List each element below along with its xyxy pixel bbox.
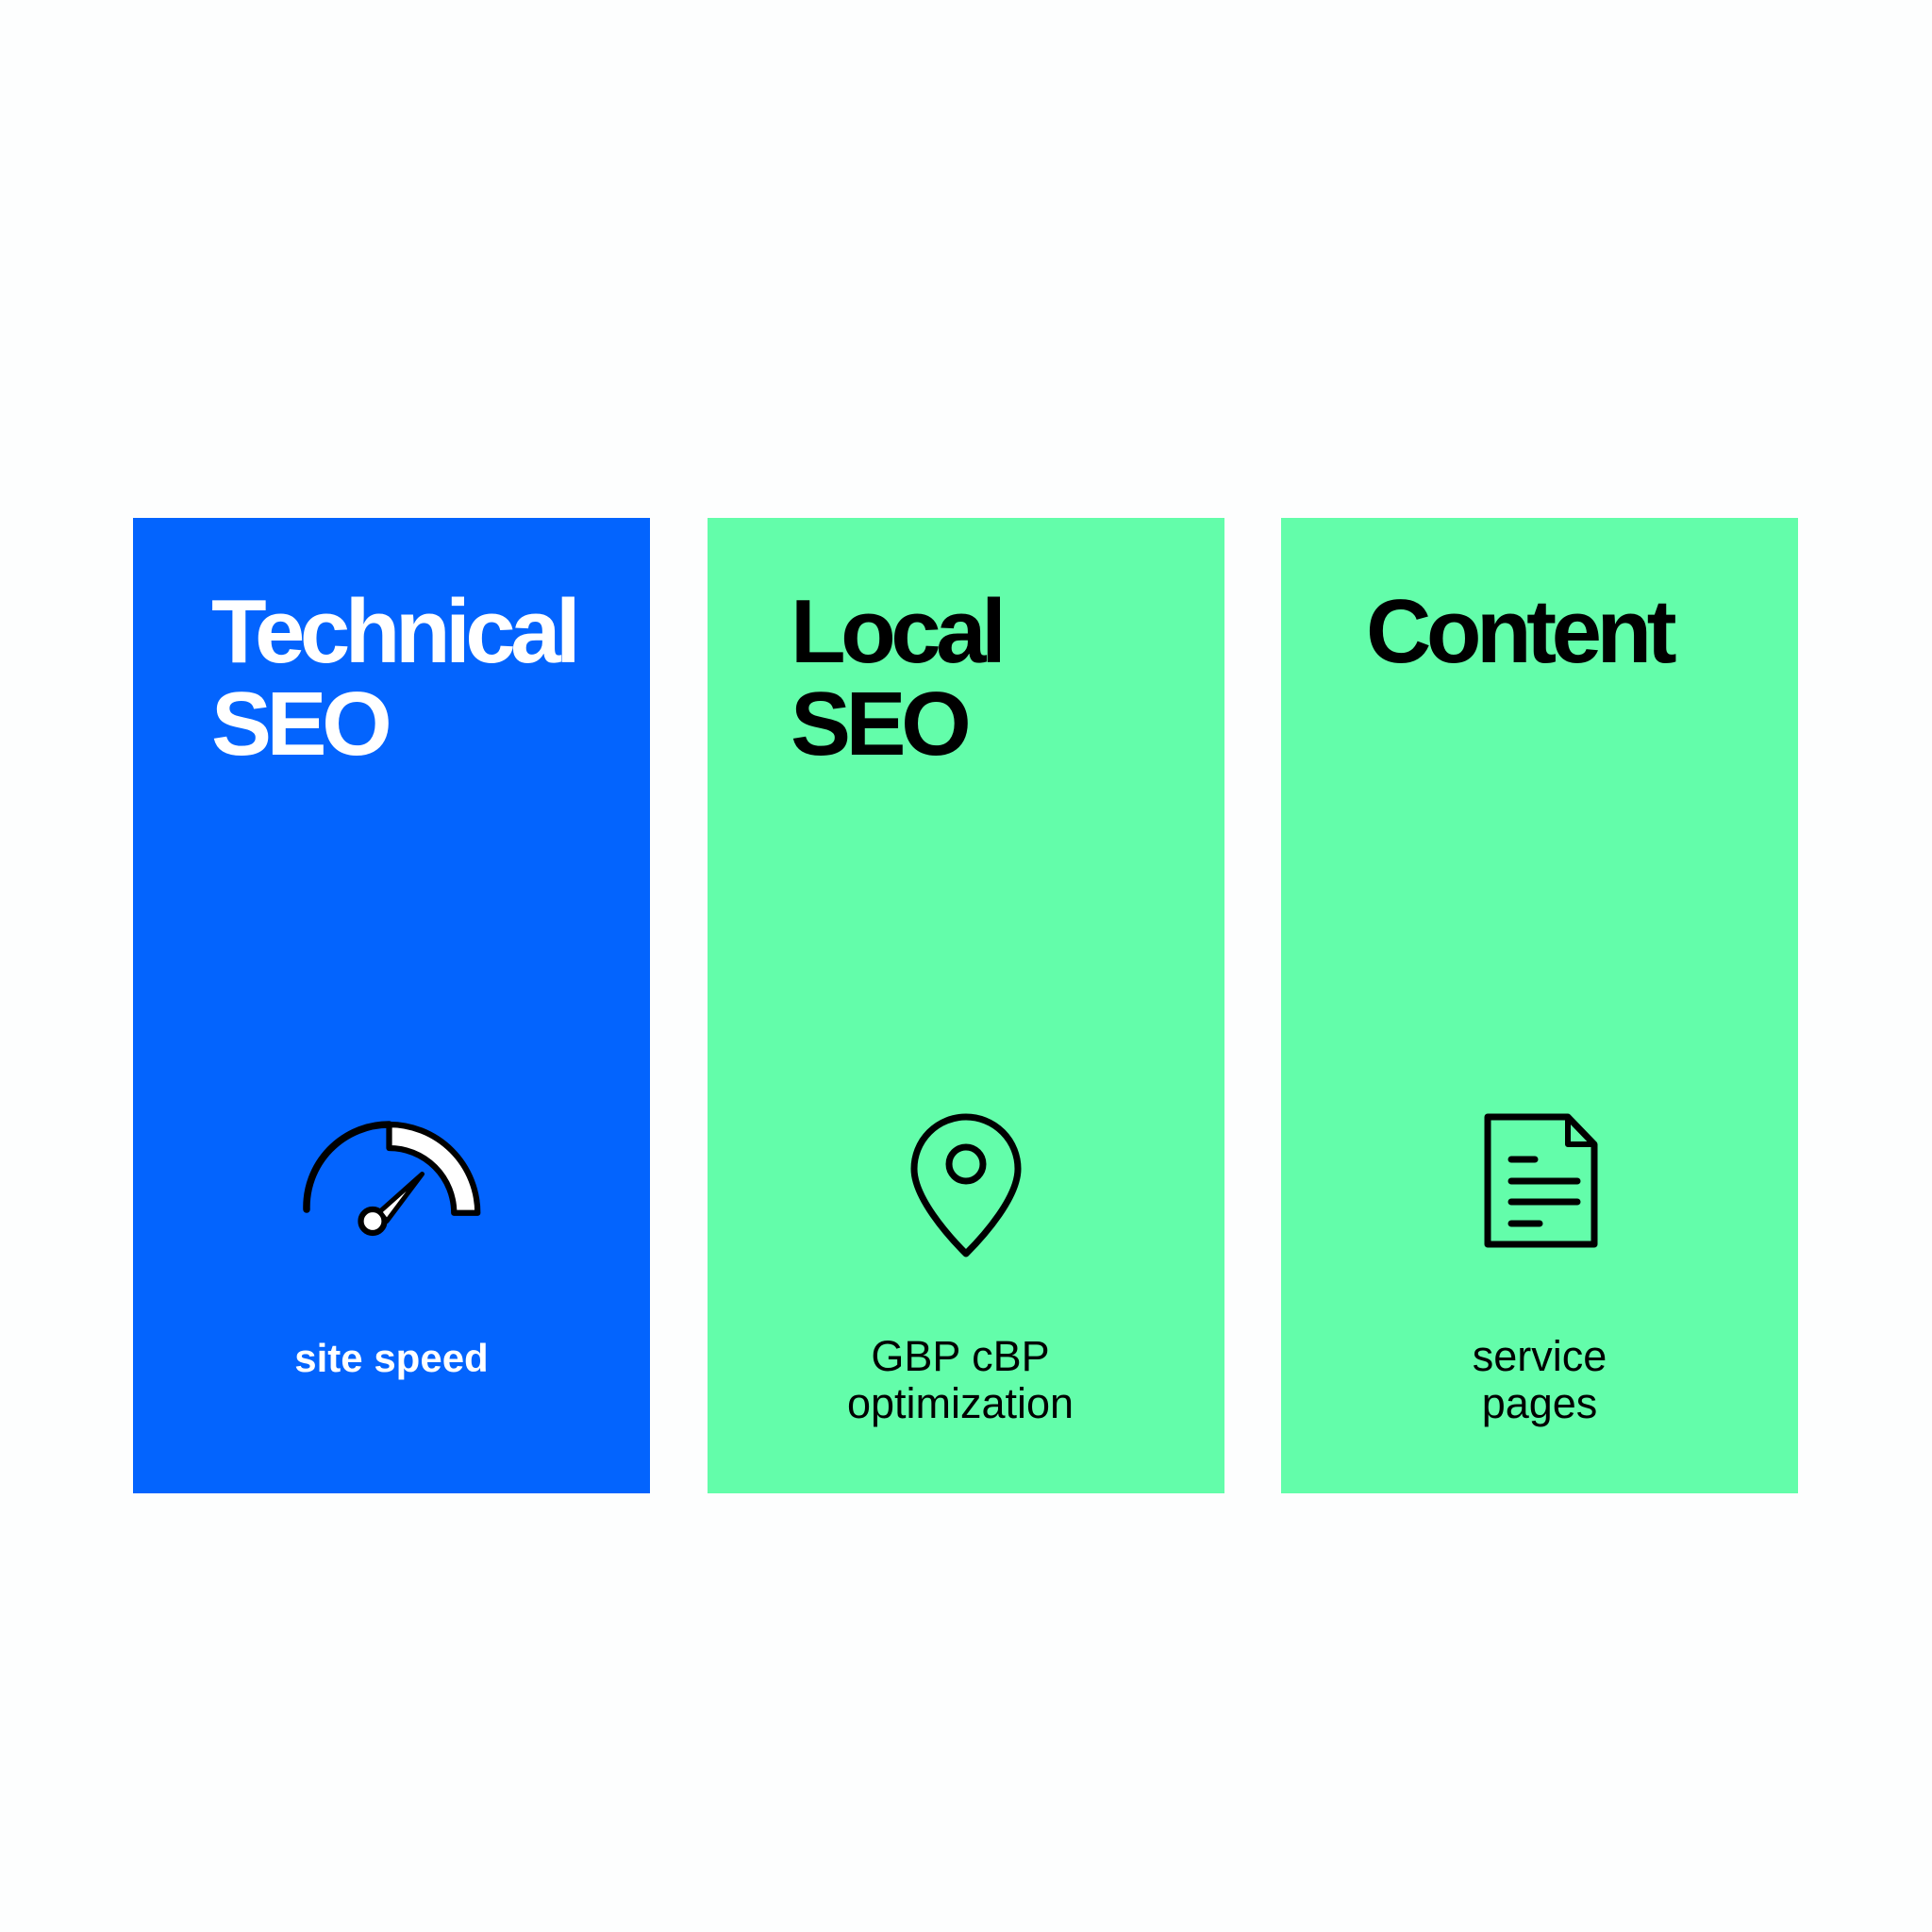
label: service pages bbox=[1473, 1332, 1607, 1427]
panel: technical SEO bbox=[133, 518, 650, 1493]
panel: local SEO bbox=[708, 518, 1224, 1493]
heading: Local SEO: Local bbox=[791, 581, 1001, 682]
heading: Content: Content bbox=[1366, 581, 1672, 682]
heading: Technical SEO: SEO bbox=[211, 674, 387, 774]
label: site speed: site speed bbox=[294, 1336, 489, 1380]
label: GBP optimization bbox=[847, 1332, 1074, 1427]
label: service pages: service bbox=[1473, 1332, 1607, 1380]
panel: content bbox=[1281, 518, 1798, 1493]
label: GBP optimization: GBP cBP bbox=[871, 1332, 1050, 1380]
label: service pages: pages bbox=[1482, 1379, 1597, 1427]
heading: Local SEO bbox=[791, 581, 1001, 774]
icon: map pin bbox=[911, 1113, 1021, 1257]
icon: speedometer bbox=[303, 1121, 481, 1236]
heading: Technical SEO bbox=[211, 581, 575, 774]
heading: Technical SEO: Technical bbox=[211, 581, 575, 682]
icon: document bbox=[1485, 1113, 1598, 1247]
heading: Local SEO: SEO bbox=[791, 674, 966, 774]
label: GBP optimization: optimization bbox=[847, 1379, 1074, 1427]
